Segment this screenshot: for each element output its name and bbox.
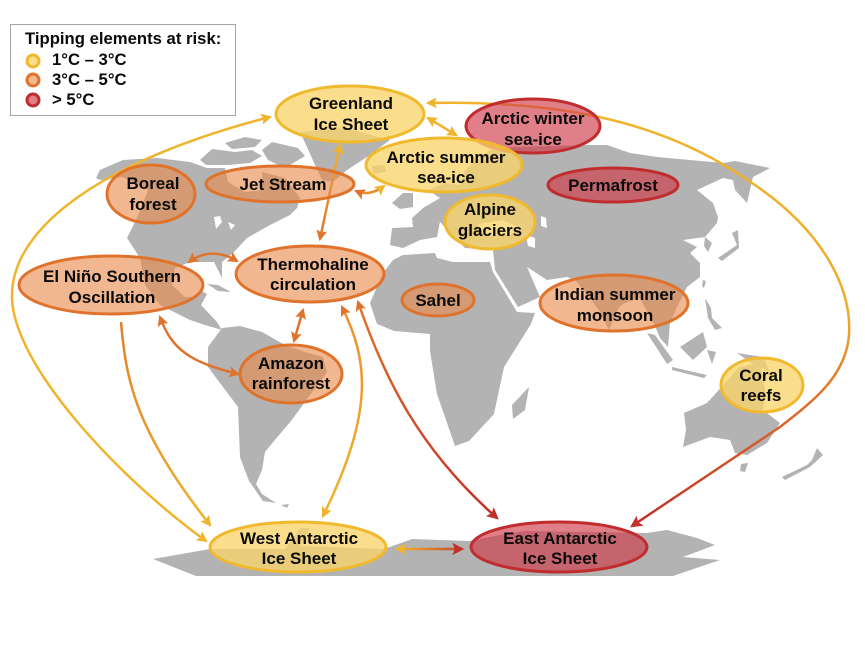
node: West Antarctic Ice Sheet: Ice Sheet (262, 549, 337, 568)
node: Boreal forest (107, 165, 195, 223)
node: Thermohaline circulation (236, 246, 384, 302)
arrow: Greenland to East Antarctic (428, 103, 849, 526)
node: Coral reefs: reefs (741, 386, 781, 405)
node: East Antarctic Ice Sheet (471, 522, 647, 572)
node: Coral reefs: Coral (739, 366, 783, 385)
node: Arctic winter sea-ice (466, 99, 600, 153)
Antarctica (153, 528, 720, 576)
UK (392, 193, 413, 209)
New Zealand (782, 448, 823, 480)
node: Sahel: Sahel (415, 291, 461, 310)
node: Jet Stream: Jet Stream (240, 175, 326, 194)
node: Thermohaline circulation: circulation (270, 275, 356, 294)
Tasmania (740, 463, 748, 472)
legend item: above 5 degrees: > 5°C (52, 90, 94, 109)
arrow: Thermohaline to West Antarctic (323, 307, 362, 516)
node: Arctic summer sea-ice (366, 138, 522, 192)
node: El Nino Southern Oscillation: El Niño Southern (43, 267, 181, 286)
node: Arctic summer sea-ice: Arctic summer (386, 148, 506, 167)
node: Thermohaline circulation: Thermohaline (257, 255, 369, 274)
connection arrows (12, 103, 849, 549)
node: Permafrost: Permafrost (568, 176, 658, 195)
node: West Antarctic Ice Sheet (210, 522, 386, 572)
node: Greenland Ice Sheet (276, 86, 424, 142)
Sakhalin and Taiwan (702, 280, 706, 288)
node: El Nino Southern Oscillation (19, 256, 203, 314)
arrow: Jet Stream to Arctic summer (356, 186, 384, 193)
Madagascar (512, 387, 529, 419)
arrow: ENSO to West Antarctic (121, 322, 210, 525)
Cuba (207, 284, 231, 292)
node: Indian summer monsoon: Indian summer (555, 285, 676, 304)
North America (96, 158, 300, 330)
node: Indian summer monsoon: monsoon (577, 306, 653, 325)
arrow: ENSO to Amazon (160, 317, 238, 374)
node: Permafrost (548, 168, 678, 202)
node: Indian summer monsoon (540, 275, 688, 331)
node: Boreal forest: Boreal (127, 174, 179, 193)
node: Alpine glaciers: Alpine (464, 200, 516, 219)
node: West Antarctic Ice Sheet: West Antarctic (240, 529, 358, 548)
arrow: Thermohaline to Amazon (294, 310, 303, 341)
arrow: Greenland to Thermohaline (320, 145, 340, 239)
Iceland (372, 165, 386, 174)
Eurasia (390, 145, 770, 347)
legend item: above 5 degrees (27, 90, 94, 109)
Great Lakes (214, 216, 235, 230)
node: Jet Stream (206, 166, 354, 202)
node: Amazon rainforest: Amazon (258, 354, 324, 373)
arrow: West to East Antarctic (397, 548, 462, 550)
node: Coral reefs (721, 358, 803, 412)
Greenland (300, 128, 390, 182)
legend: Tipping elements at risk: (25, 29, 221, 48)
node: Arctic winter sea-ice: sea-ice (504, 130, 562, 149)
Falklands (281, 504, 289, 508)
node: Amazon rainforest: rainforest (252, 374, 331, 393)
Korea and Japan (704, 230, 739, 261)
Southeast Asia islands (647, 298, 770, 378)
node: Alpine glaciers: glaciers (458, 221, 522, 240)
South America (208, 326, 327, 503)
Arctic islands (200, 137, 305, 168)
node: Amazon rainforest (240, 345, 342, 403)
arrow: ENSO to Thermohaline (189, 254, 237, 262)
legend item: 1 to 3 degrees: 1°C – 3°C (52, 50, 127, 69)
arrow: Thermohaline to East Antarctic (358, 302, 497, 518)
node: East Antarctic Ice Sheet: East Antarctic (503, 529, 617, 548)
node: Sahel (402, 284, 474, 316)
node: Greenland Ice Sheet: Ice Sheet (314, 115, 389, 134)
legend (10, 24, 236, 116)
node: Greenland Ice Sheet: Greenland (309, 94, 393, 113)
arrow: Greenland to Arctic summer (428, 118, 456, 135)
Black Sea, Caspian, Aral (478, 216, 547, 248)
node: Arctic winter sea-ice: Arctic winter (482, 109, 585, 128)
world map (96, 128, 823, 576)
Australia (683, 362, 780, 455)
node: Alpine glaciers (445, 195, 535, 249)
Africa (370, 253, 535, 446)
node: El Nino Southern Oscillation: Oscillation (69, 288, 155, 307)
node: Arctic summer sea-ice: sea-ice (417, 168, 475, 187)
legend item: 3 to 5 degrees: 3°C – 5°C (52, 70, 127, 89)
arrow: West Antarctic to Greenland (12, 117, 270, 541)
node: East Antarctic Ice Sheet: Ice Sheet (523, 549, 598, 568)
node: Boreal forest: forest (129, 195, 177, 214)
